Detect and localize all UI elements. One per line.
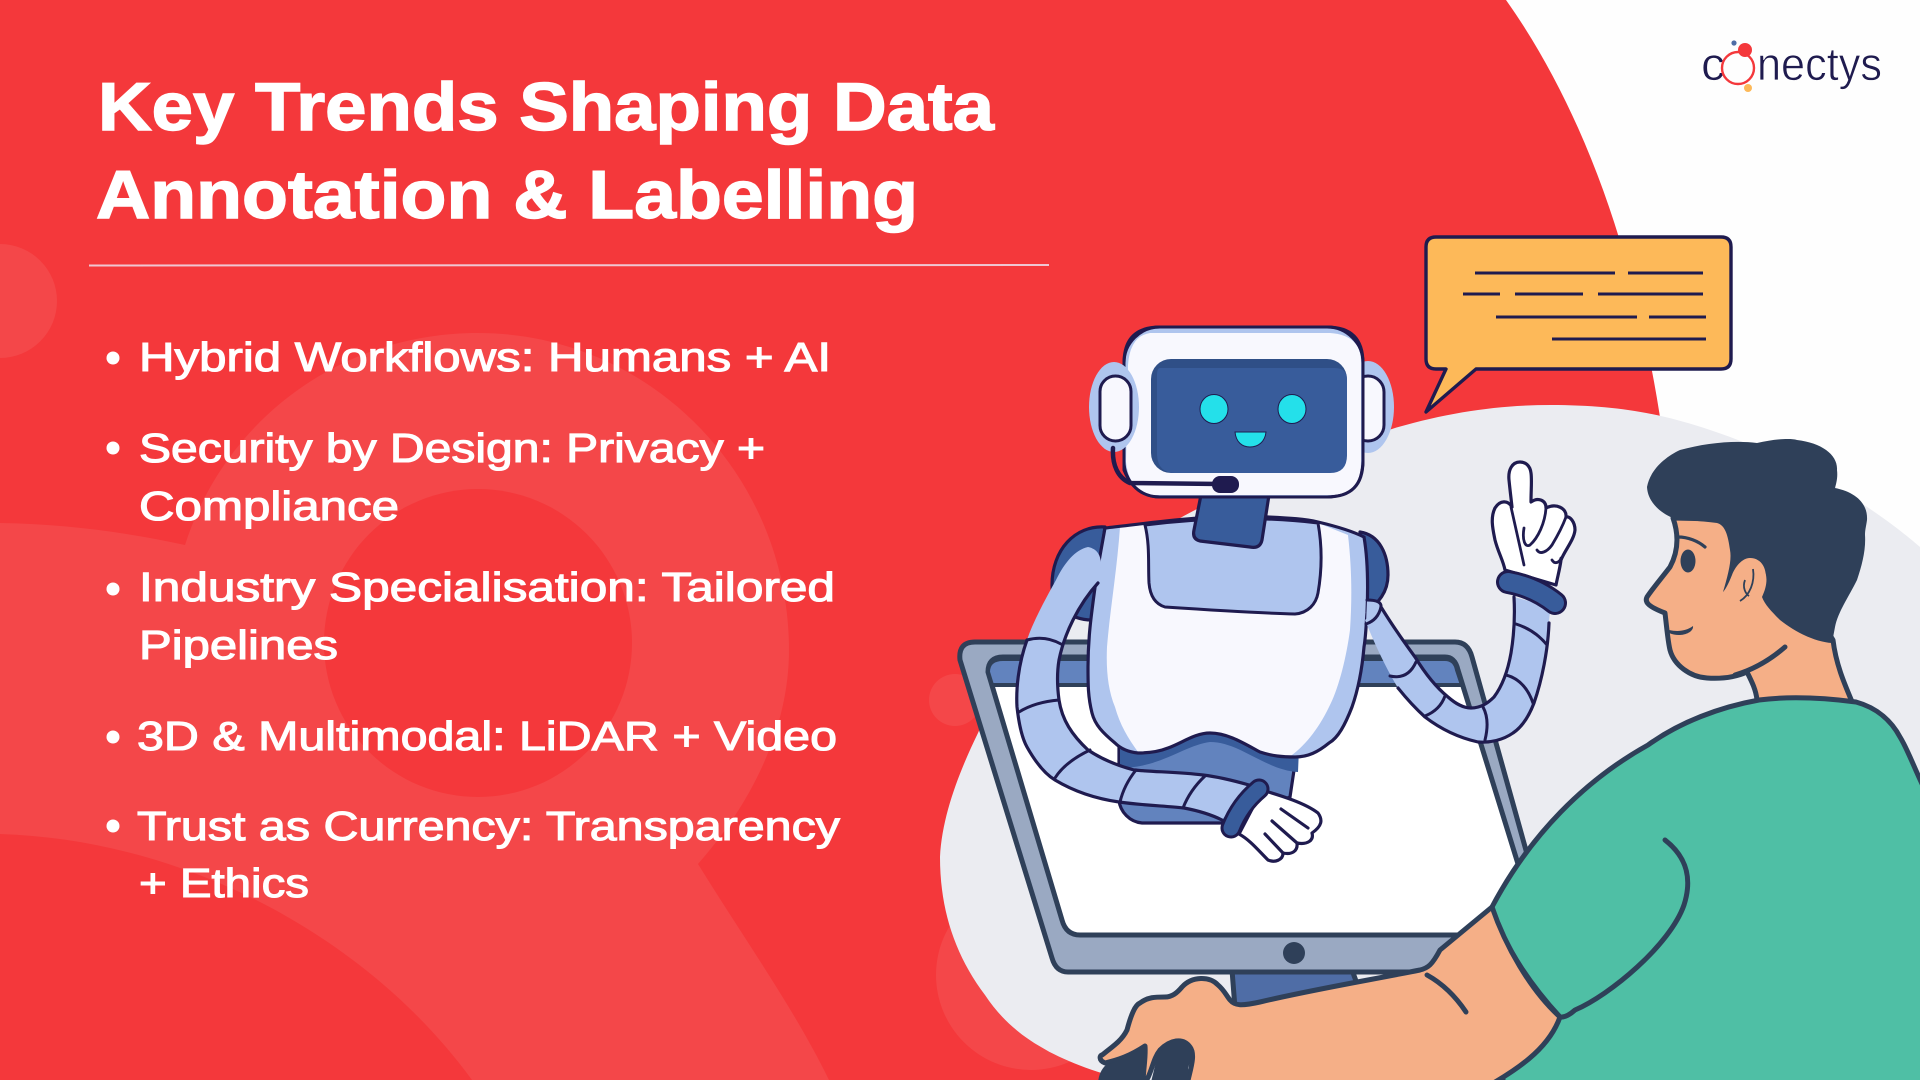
bullet: trust as currency xyxy=(106,803,841,906)
monitor frame xyxy=(960,642,1560,972)
person neck and face xyxy=(1646,518,1853,704)
robot chest bib xyxy=(1145,519,1321,614)
robot head xyxy=(1124,327,1363,497)
person shirt xyxy=(1492,698,1920,1080)
title xyxy=(96,69,995,233)
bullet: trust as currency: + Ethics xyxy=(139,860,309,906)
robot shoulders xyxy=(1052,527,1388,620)
bullet: security by design xyxy=(106,425,765,529)
bullet: security by design: Compliance xyxy=(139,483,399,529)
monitor top band xyxy=(988,659,1462,685)
monitor stand xyxy=(1232,970,1360,1008)
robot left ear xyxy=(1089,362,1139,452)
bullet: industry specialisation: Pipelines xyxy=(139,622,338,668)
person brow eye mouth xyxy=(1669,537,1705,635)
bullet: industry specialisation xyxy=(106,564,835,668)
robot lower torso xyxy=(1119,725,1300,823)
computer mouse xyxy=(1098,1040,1192,1080)
robot lower cuff xyxy=(1231,789,1259,828)
monitor screen xyxy=(988,657,1540,935)
robot lower hand xyxy=(1239,790,1321,861)
grey backdrop blob xyxy=(940,405,1920,1080)
person jaw line xyxy=(1735,647,1785,675)
robot eyes xyxy=(1200,394,1228,424)
robot xyxy=(1017,327,1575,861)
robot raised hand xyxy=(1492,462,1575,585)
robot right arm xyxy=(1365,597,1551,742)
robot smile xyxy=(1235,432,1266,447)
person ear xyxy=(1734,558,1766,606)
robot neck xyxy=(1194,495,1269,547)
logo: conectys: nectys xyxy=(1757,38,1882,90)
person arm and hand xyxy=(1098,907,1560,1080)
robot right ear xyxy=(1342,361,1394,453)
robot torso outline xyxy=(1088,516,1368,757)
robot screen xyxy=(1151,359,1347,473)
background pattern: lighter shapes xyxy=(0,244,1126,1080)
bullet list xyxy=(106,334,841,906)
robot torso highlight xyxy=(1107,523,1351,757)
white corner area xyxy=(1506,0,1920,1080)
robot raised cuff xyxy=(1508,582,1555,603)
bullet: 3D and multimodal: 3D & Multimodal: LiDAR + Video xyxy=(137,713,837,759)
logo: conectys: c xyxy=(1701,38,1725,90)
logo: conectys xyxy=(1701,38,1882,92)
person hair xyxy=(1647,439,1867,643)
bullet: trust as currency: Trust as Currency: Transparency xyxy=(137,803,841,849)
title: Key Trends Shaping Data xyxy=(98,69,995,145)
monitor button xyxy=(1283,942,1305,964)
robot torso xyxy=(1088,516,1368,757)
bullet: industry specialisation: Industry Specialisation: Tailored xyxy=(139,564,835,610)
robot headset mic xyxy=(1113,448,1239,493)
monitor xyxy=(960,642,1560,1008)
person xyxy=(1098,439,1920,1080)
bullet: security by design: Security by Design: Privacy + xyxy=(139,425,765,471)
title: Annotation & Labelling xyxy=(96,157,918,233)
robot left arm xyxy=(1017,547,1249,820)
speech bubble xyxy=(1426,237,1731,412)
bullet: hybrid workflows: Hybrid Workflows: Humans + AI xyxy=(139,334,831,380)
